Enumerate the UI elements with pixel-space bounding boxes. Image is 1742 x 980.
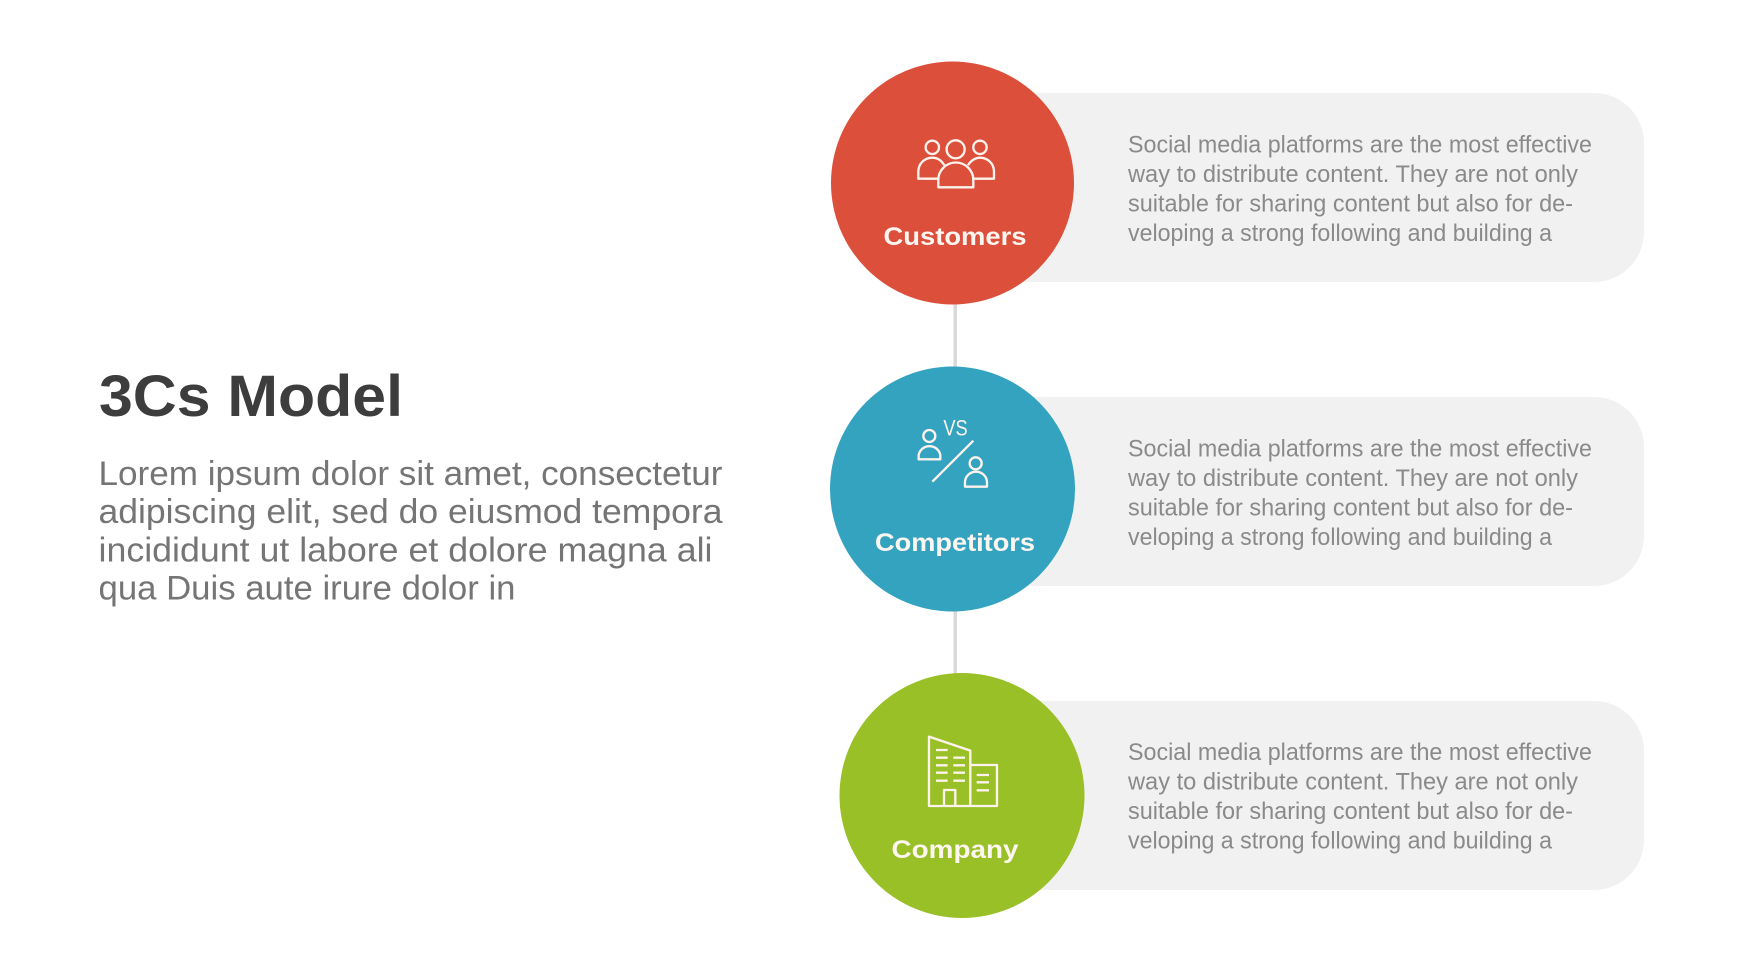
intro text block: Lorem ipsum dolor sit amet, consectetur xyxy=(98,455,723,493)
customers description xyxy=(1127,132,1592,247)
label: competitors: Competitors xyxy=(875,529,1035,557)
circle: competitors xyxy=(830,366,1075,612)
icon: competitors versus xyxy=(919,416,987,487)
customers description: way to distribute content. They are not only xyxy=(1127,161,1578,188)
intro text block: adipiscing elit, sed do eiusmod tempora xyxy=(98,493,723,531)
competitors description: veloping a strong following and building a xyxy=(1128,524,1553,551)
company description: suitable for sharing content but also for de- xyxy=(1128,798,1573,825)
competitors description: way to distribute content. They are not only xyxy=(1127,465,1578,492)
competitors description xyxy=(1127,436,1592,551)
competitors description: suitable for sharing content but also for de- xyxy=(1128,494,1573,522)
icon: competitors versus: VS xyxy=(943,416,968,441)
label: company: Company xyxy=(892,836,1019,864)
panel: company xyxy=(950,701,1644,890)
customers description: Social media platforms are the most effective xyxy=(1128,132,1592,158)
intro text block: qua Duis aute irure dolor in xyxy=(98,570,516,608)
panel: customers xyxy=(950,93,1644,282)
connector: competitors to company xyxy=(954,606,957,678)
circle: company xyxy=(840,673,1084,918)
icon: company building xyxy=(929,737,997,806)
company description: Social media platforms are the most effective xyxy=(1128,739,1592,766)
customers description: veloping a strong following and building a xyxy=(1128,220,1553,247)
icon: customers group xyxy=(918,140,994,187)
company description: way to distribute content. They are not only xyxy=(1127,768,1578,796)
customers description: suitable for sharing content but also for de- xyxy=(1128,190,1573,218)
panel: competitors xyxy=(950,397,1644,586)
label: customers: Customers xyxy=(884,223,1026,251)
connector: customers to competitors xyxy=(954,300,957,372)
circle: customers xyxy=(831,62,1074,304)
title: 3Cs Model xyxy=(99,364,403,429)
intro text block xyxy=(98,455,723,608)
company description: veloping a strong following and building a xyxy=(1128,828,1553,854)
competitors description: Social media platforms are the most effective xyxy=(1128,436,1592,462)
company description xyxy=(1127,739,1592,854)
intro text block: incididunt ut labore et dolore magna ali xyxy=(98,532,712,570)
